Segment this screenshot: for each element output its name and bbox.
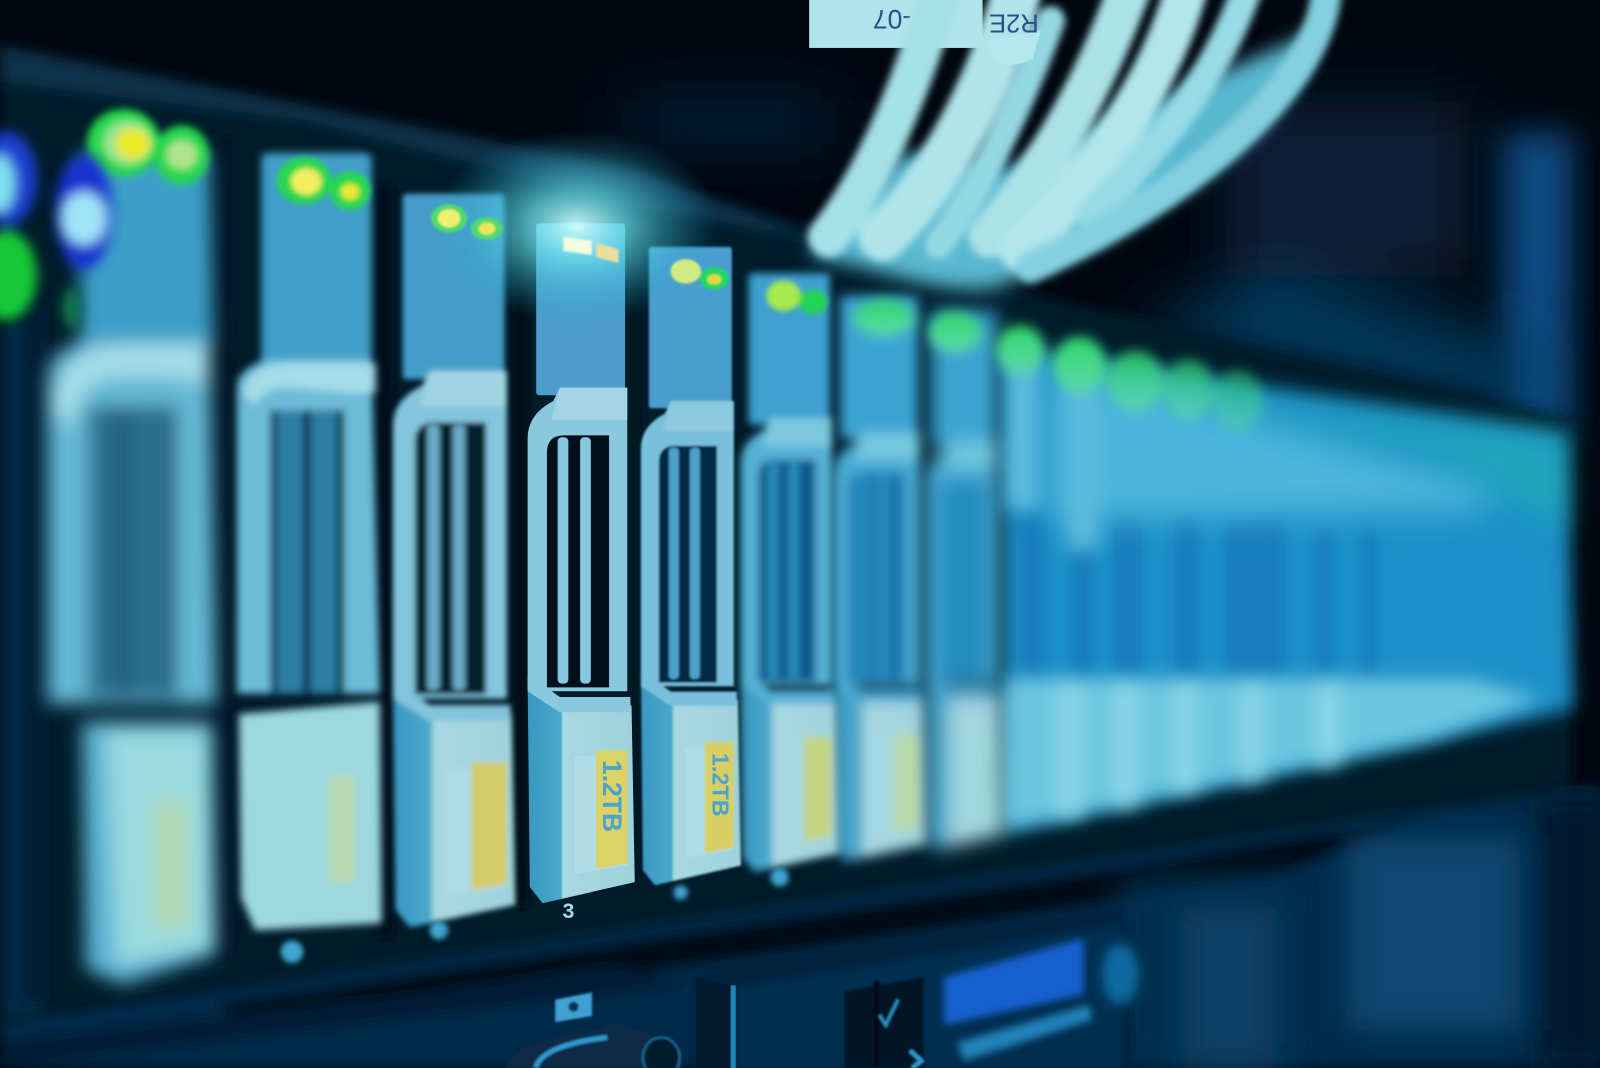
band lower light zone: [1005, 678, 1543, 828]
drive latch dots: [281, 868, 789, 963]
cable bundle base: [814, 31, 1316, 289]
band upper light zone: [1051, 377, 1500, 520]
LEDs drive 3: [431, 204, 503, 240]
lower light columns: [1056, 685, 1341, 818]
cable tag: [809, 0, 983, 48]
drive 2: [237, 153, 382, 930]
tag text: -07: [873, 4, 911, 34]
shadows between drives: [25, 133, 643, 1000]
drive capacity labels: [597, 753, 733, 832]
status LEDs: [0, 109, 1263, 431]
pale columns under near LEDs: [1005, 357, 1099, 551]
blurred blue column: [1502, 133, 1573, 439]
drive 6: [741, 273, 839, 872]
LEDs drive 2: [277, 157, 371, 210]
LEDs drive 4: [563, 237, 618, 263]
dim shapes behind: [623, 97, 1530, 418]
central lens flare: [434, 130, 719, 323]
reflection of equipment on right: [1122, 796, 1600, 1068]
drive 4 (in focus): [528, 223, 635, 903]
LEDs drive 6: [766, 281, 828, 314]
lower panel: [0, 785, 1600, 1068]
drive 7: [833, 296, 926, 862]
label 1.2 TB drive 4: 1.2TB: [597, 760, 627, 832]
buttons: [845, 977, 923, 1068]
LEDs drive 5: [670, 259, 729, 290]
cables: [809, 0, 1326, 289]
VGA connector: [505, 1022, 682, 1068]
cable marking: R2E: [989, 8, 1039, 36]
LCD text strip: [957, 1005, 1092, 1061]
drive 5: [641, 247, 741, 885]
label 1.2 TB drive 5: 1.2TB: [707, 753, 733, 817]
cable sleeve: [985, 31, 1041, 65]
drives: [47, 153, 1004, 984]
rack lower chassis: [0, 785, 1600, 1068]
LCD display: [944, 938, 1084, 1025]
far-left blue LEDs: [0, 132, 112, 328]
LEDs drive 1: [87, 109, 209, 185]
drive 1: [47, 153, 217, 984]
individual cables: [829, 0, 1326, 267]
port icon: [555, 993, 592, 1022]
background: blurred equipment on the right: [623, 97, 1573, 439]
LEDs far drives: [853, 300, 1263, 431]
teal upper edge: [1204, 403, 1566, 530]
front panel box: [694, 908, 1133, 1068]
blurred far drives band: [1005, 347, 1573, 831]
slot number 3: 3: [562, 899, 574, 923]
indicator glow: [1102, 944, 1139, 1005]
drive 3: [393, 194, 515, 927]
drive 8: [924, 311, 1004, 851]
band base: [1005, 347, 1573, 831]
band dark stripes: [1020, 510, 1376, 678]
